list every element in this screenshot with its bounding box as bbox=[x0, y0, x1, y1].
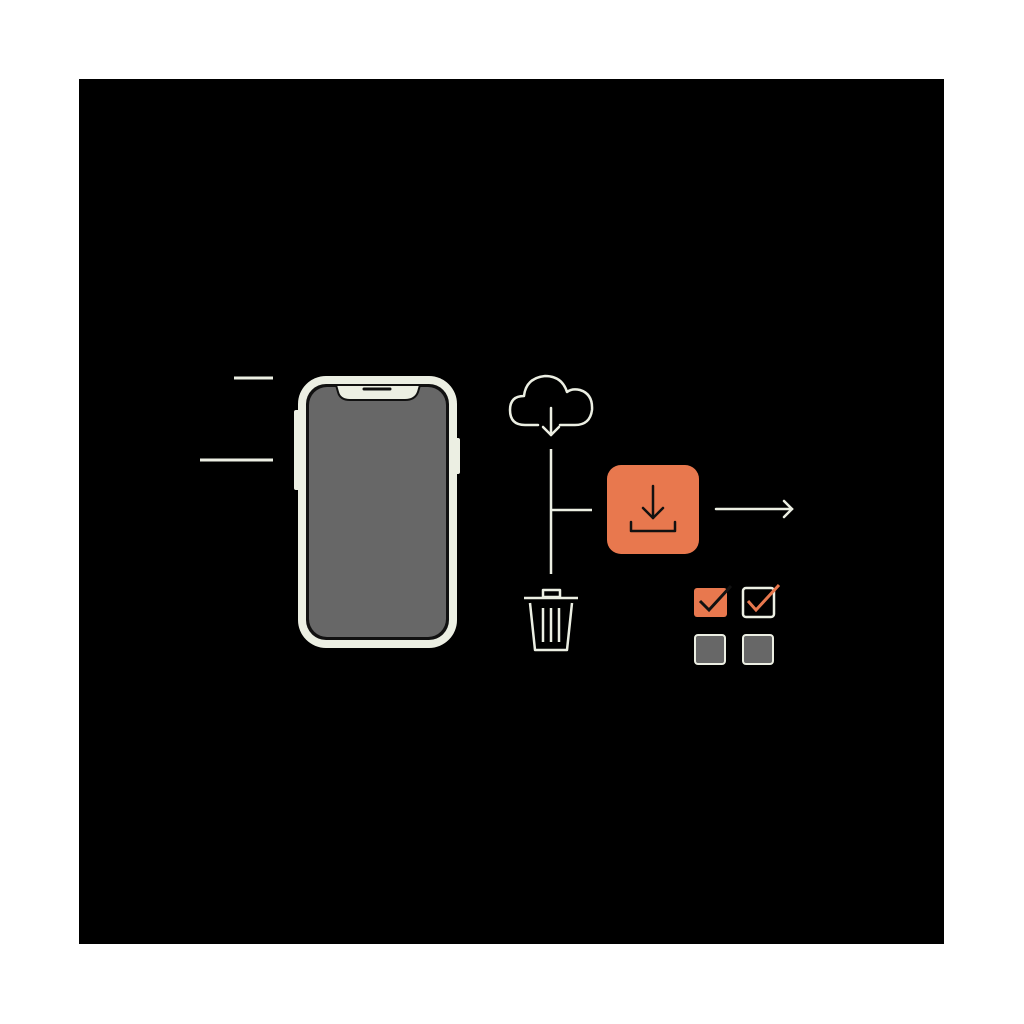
icon: download button bbox=[607, 465, 699, 554]
checklist bbox=[694, 585, 779, 664]
icon: smartphone bbox=[294, 376, 460, 648]
icon: trash bbox=[524, 590, 578, 650]
motion lines bbox=[200, 378, 273, 460]
panel: black background bbox=[79, 79, 944, 944]
arrow bbox=[716, 501, 792, 517]
icon: cloud download bbox=[510, 376, 592, 435]
connector lines bbox=[551, 449, 592, 574]
